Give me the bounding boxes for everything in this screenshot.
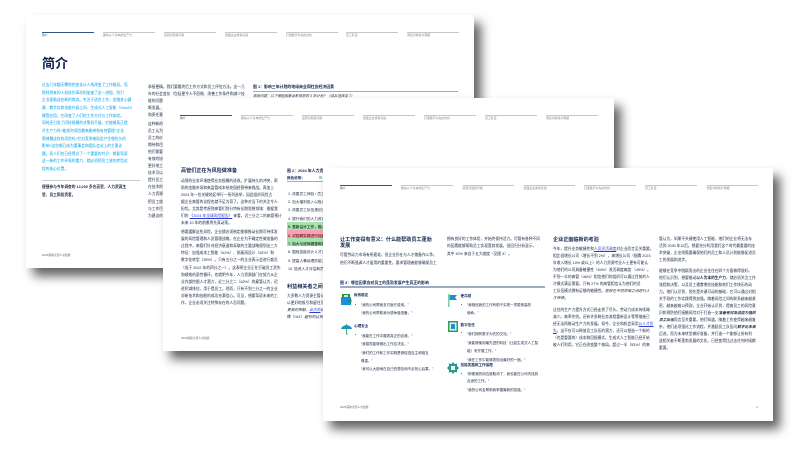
intro text in blue: 影响?这些都已成为董事会和团队会议上的主要议 [42,144,122,148]
quotes: 尊重。” [361,359,373,363]
navigation tabs: 员工队伍 [346,33,358,37]
navigation tabs: 调查对象和计算据 [546,116,569,120]
paragraph: column 4 top: 活到 2030 年以后。想要充分利用我们这个时代最重要的技 [659,244,755,248]
ranked items: 2. 加大福利投入以吸引和留 [288,200,333,204]
navigation tabs: 调查对象和计算据 [706,186,730,190]
column 2 text: 能的问题）增加了雇主和员工的期望。人才的能动变化在不 [148,98,245,102]
ranked items: 3. 改善员工队伍规划流程 [288,208,329,212]
navigation tabs [180,115,598,120]
figure 1 rule [253,91,458,92]
paragraph: column 3 top: 工队伍模式拥有足够的敏捷性。能够在不同领域之间进行人 [553,289,650,293]
paragraph: column 3 bottom: 先。这不仅可以释放员工队伍的潜力，还可以塑造一个新的 [553,329,650,333]
quotes: “我相信我的工作有助于实现一项更崇高的 [467,303,531,307]
bullets [461,304,462,305]
paragraph left: 尽管劳动力市场有所疲软，但企业仍在与人才储备作斗争。 [340,253,437,257]
ranked items: 9. 提高人事经理的能力 [288,259,325,263]
icon: chip [448,321,458,332]
intro text in blue: 需律最这样的风险吗?它对竞争格局会产生哪些久的 [42,137,126,141]
title: 简介 [42,56,68,71]
figure 3 rule [340,286,545,288]
panel: financial security [341,292,412,315]
navigation tabs: 运营创但和平衡 [462,186,483,190]
ranked items: 1. 改善员工体验 / 员工保留 [288,192,332,196]
intro text in blue: 康、数字化和技能升级之间，生成式人工智能（GenAI） [42,106,134,110]
navigation tabs: 简介 [42,33,48,37]
paragraph: column 3 bottom: 经无法再推动生产力的发展。如今，企业和机会采用以人才优 [553,322,653,326]
bullets [355,304,356,305]
column 2 second paragraph: 更好地工作的 [148,164,170,168]
icon: gear [447,362,459,374]
navigation tabs: 员工队伍 [485,116,497,120]
quotes: “我的公司会帮助我掌握最新的技能。” [467,388,525,392]
intro text in blue [42,82,134,171]
heading: 心理安全 [354,324,368,328]
paragraph: column 3 top [553,246,653,300]
quotes [467,332,538,362]
heading: meaningful work [340,236,432,249]
page 3: meaningful work [323,168,773,421]
navigation tabs: 打造数字为先的文化 [286,33,312,37]
column 2 second paragraph: 人力资源领导 [148,192,170,196]
ranked items: 8. 围绕技能设计人才流程 [288,250,329,254]
navigation tabs: 调查对象和计算据 [407,33,430,37]
bullets [461,372,462,374]
paragraph 2: 进积减排估，用于提员工。然而，只有不到三分之一的企业 [181,287,278,291]
navigation tabs [340,185,758,190]
paragraph 2: 业内部挖掘人才潜力，近三分之二（62%）的雇管认为，迟 [181,280,278,284]
paragraph: column 3 top: 为他们的公司具备敏捷性（54%）流活调度高度 （49%）。 [553,268,651,272]
quotes [361,302,412,315]
navigation tabs: 简介 [340,186,346,190]
column 2 second paragraph: 在技术的支持 [148,185,170,189]
heading: meaningful work: 让工作变得有意义：什么能帮助员工蓬勃 [340,236,432,242]
panel: psychological safety [341,324,434,371]
column 2 second paragraph: 为建议的企业 [148,214,170,218]
column 2 second paragraph: 他们需要更多 [148,150,170,154]
ranked items [288,192,333,271]
quotes: 合适的工作。” [467,379,489,383]
navigation tabs: 运营创但和平衡 [164,33,184,37]
paragraph: column 4 bottom: 员工队伍而言至关重要。他们知道，随着工作变得越来越复 [659,318,756,322]
icon: wallet [341,294,352,305]
panel: skills development and job security [447,362,538,392]
panel: sense of purpose [448,294,531,315]
heading: meaningful work: 发展 [340,243,350,249]
paragraph: column 4 bottom: 益相关者不断蓬勃发展的文化，已经变得比过去任何时候都 [659,339,756,343]
paragraph: column 4 bottom [659,268,756,350]
paragraph 2: 对新技术和技能的成功充满信心。可见，想要驾驭未来的工 [181,294,278,298]
column 2 text: 承接更精。我们要看终后工作方式和员工评估方法。这一几 [148,84,245,88]
ranked items: 7. 加大与进体健重和福利 [288,242,329,246]
footer: 2025麻球全部人才趋势 [340,405,369,409]
intro text in blue: 企业面临适应新的常态。专注于适合工作，金融身心健 [42,98,131,102]
heading: 财务稳定 [354,293,368,297]
paragraph: column 4 bottom: 迈进。而为未来转型做好准备，并打造一个能够让所有利 [659,332,752,336]
quotes: “我们的工作和工作实践是够促进自主和相互 [361,351,429,355]
paragraph: column 4 bottom: 关手段的工作实践得到加强。随着风险之间的联系越来越紧 [659,297,756,301]
paragraph: column 4 bottom: 杂，他们必须强化工作流程，并激励员工队伍向数字化未来 [659,325,756,329]
heading: 数字信任 [460,322,475,326]
page 2: executives preparing for risk [163,98,614,351]
column 2 second paragraph: 员工的价值与绩 [148,136,174,140]
navigation tabs: 员工队伍 [645,186,657,190]
column 2 text: 断发展。企业与员工的契约也在变化，那些考虑全员、成本 [148,106,245,110]
quotes: “我能够使用最先进的科技（比如生成式人工智 [467,341,538,345]
stakeholder text [287,293,330,319]
heading: 技能发展和工作保障 [460,362,493,366]
bold survey note: 管、员工和投资者。 [42,192,75,196]
ranked items: 6. 对招聘实践进行加强 [288,234,325,238]
footer: 2025麻球全部人才趋势 [181,336,210,340]
navigation tabs: 加强企业或者高绩 [524,186,547,190]
paragraph right: 拥有良好的工作体验，并始终保持活力。尽管有各种不同 [447,236,540,240]
quotes [467,372,538,392]
paragraph: column 4 top [659,236,756,262]
heading: 高管们正在为风险做准备 [181,168,237,174]
stakeholder text: 以更好地吸引和留住顶尖 [287,301,328,305]
column 2 second paragraph: 与工作目标 [148,207,167,211]
column 2 text: 和责任意识的公司更有机会。 [148,112,196,116]
paragraph 2: 想要缓解这些风险，企业就必须制定能够推动长期可持续发 [181,230,278,234]
figure 2 rule [287,181,497,182]
paragraph: column 3 top: 才模式满足需要。只有 27% 的高管相信认为他们的员 [553,282,641,286]
paragraph right: 的因素能够帮助员工实现蓬勃发展，但回归分析显示， [447,244,536,248]
ranked items: 4. 提升我们的人力资源能力 [288,217,333,221]
intro text in blue: 过去几年翻天覆地的变化从人地改变了工作格局。而 [42,83,128,87]
navigation tabs: 推动以人为本的生产力 [401,186,430,190]
quotes [467,302,531,315]
figure 1 title: 图 1：影响三年计划的地缘商业和社会经济因素 [253,84,334,89]
paragraph: column 4 bottom: 流程和决策，以及员工遇食哪些技能和他们工作快乐的动 [659,283,752,287]
paragraph 1: 担忧。尤其是考虑到高管们划分特有长期思想领域：根据我 [181,206,278,210]
highlight bands [287,222,327,230]
colour legend: 颜色说明： [287,176,305,180]
paragraph: column 3 top: 年收入增长 10% 或以上）的人力资源专业人士更有可能认 [553,261,648,265]
ranked items: 5. 重新设计工作，融入AI [288,225,329,229]
quotes: “我可以大胆地在自己的想法而不必担心后果。” [361,367,433,371]
navigation tabs: 推动以人为本的生产力 [241,116,270,120]
ranked list with highlights [287,192,333,271]
column 2 second paragraph: 员工认为，工作 [148,129,174,133]
stakeholder text: 傅（041）超有的比例认为 [287,315,330,319]
paragraph 1 [181,178,282,225]
paragraph 2: 过程中，高管们针对经济衰退和采取的主要战略规划出三大 [181,244,278,248]
paragraph: column 4 top: 管认为，如果不关键使用人工智能，他们的企业将无法存 [659,236,752,240]
intro text in blue: 升生产力吗?能如何风险最高能带和有何管理?企业 [42,129,124,133]
paragraph: column 3 bottom: 过往的生产力提升方式已经走到了尽头。劳动力成本持续绳 [553,308,650,312]
paragraph: column 4 bottom: 识和预防他们接触风险对于打造一支准备有对及适应力强的 [659,311,756,315]
column 2 second paragraph: 提升员工体验 [148,178,170,182]
paragraph 1: 动荡的业务环境使得业务规模的进改。扩展持久的冲突，帮 [181,178,278,182]
bullets [461,332,462,333]
icon: flag [448,294,457,307]
intro text in blue: 题。而人们也已经得出了一个重要的共识：想要驾驭 [42,152,128,156]
paragraph: column 4 bottom: 能够在竞争中脱颖而出的企业往往在四个方面做得很好。 [659,268,752,272]
stakeholder text: 大多数人力资源主管认为 [287,294,328,298]
intro text in blue: 同时还引发了同样规模的决策机不量。它能够真正提 [42,121,128,125]
paragraph 1: 未来 10 年的前景将先真动荡。 [181,220,232,224]
quotes: “我们拥有数字为先的文化。” [467,332,511,336]
paragraph 1: 2024 年一些关键地区举行一系列选举，因此组织风险占 [181,192,272,196]
navigation tabs: 打造数字为先的文化 [424,116,450,120]
paragraph 2 [181,229,281,305]
column 2 second paragraph: 这种新的现实正 [148,122,174,126]
paragraph: column 3 bottom: 减少。高率作别。还有许多跨业务流程重新设计等等措施已 [553,315,650,319]
paragraph 2: 展的风险管理和人员管理战略。在企业为不确定性做准备的 [181,237,278,241]
navigation tabs: 加强企业或者高绩 [363,116,386,120]
legend swatch [319,176,322,179]
paragraph 2: （低于 2022 年的四分之一）。这表明企业正在打破员工资失 [181,266,281,270]
column 2 text [148,84,245,117]
paragraph: column 3 bottom: （也是重要的）成本和回报模式。生成式人工智能已经开始 [553,336,650,340]
paragraph: column 4 top: 工的发展和进步。 [659,258,689,262]
bold survey note: 便捷参与今年调查的 12,200 多名高管、人力资源主 [42,184,126,188]
paragraph 2: 特征：加强成本工智能（41%）、质蔽再设计（43%）和 [181,251,274,255]
navigation tabs: 加强企业或者高绩 [225,33,248,37]
quotes: 使命。” [467,311,479,315]
paragraph: column 3 top: 不到一半的高管（46%）相信他们的组织可以通过目前的人 [553,275,650,279]
paragraph: column 3 top: 相比低增长公司（增长不到 2%），高增长公司（指腾 2023 [553,254,651,258]
paragraph: column 3 bottom [553,307,654,347]
panel: digital confidence [448,321,538,362]
quotes: “我的公司帮我支付医疗费用。” [361,303,409,307]
paragraph: column 4 bottom: 密，越来越难以预测，企业开始认识到，提高员工的风险意 [659,304,756,308]
paragraph left: 他们不断强调人才留用的重要性。要求管理者能够确保员工 [340,261,437,265]
paragraph 2: 和绩效的恶性循环。也就明今年，人力资源部门在努力从企 [181,273,278,277]
icon: umbrella [341,324,352,335]
quotes: “我的公司帮助我为退休做准备。” [361,311,412,315]
paragraph left [340,252,437,265]
paragraph 1: 助的金融市场和高监管成本给校园经营带来挑战。再加上 [181,186,274,190]
paragraph: column 4 bottom: 力。他们认识到，领先是关键可动的基础，它可以通过对相 [659,290,756,294]
paragraph: column 3 bottom: 被人们利用，它正在改变整个格局。超过一半（53%）的高 [553,343,650,347]
navigation tabs: 推动以人为本的生产力 [103,33,132,37]
page number: 4 [756,405,758,409]
footer: 2025麻球全部人才趋势 [42,253,71,257]
intro text in blue: 程的核心位置。 [42,167,68,171]
paragraph: column 3 top: 今年，提升业务敏捷性和人员灵活调度对企业而言至关重要。 [553,246,653,250]
paragraph: column 4 bottom: 重要。 [659,346,670,350]
page 1: introduction [26,15,474,268]
quotes: “我能在工作中展现真正的自我。” [361,334,412,338]
divider [42,179,140,182]
navigation tabs: 简介 [180,116,186,120]
paragraph right: 其中 42% 来自于五大维度（见图 3）。 [447,252,512,256]
figure 1 question: 高管问题：以下哪些因素会影响您的 3 年计划？（请从选择至 7） [253,94,354,98]
navigation tabs: 打造数字为先的文化 [584,186,610,190]
quotes: “我在工作中能够表现出最好的一面。” [467,358,525,362]
column 2 second paragraph: 技术可以帮 [148,171,167,175]
paragraph: column 4 bottom: 他们认识到，想要推动以人为本的生产力，就必须关注工作 [659,276,756,280]
quotes: 能）来开展工作。” [467,349,496,353]
paragraph 1: 据企业高管的议程也就不足为奇了。这种对当下的关注令人 [181,200,278,204]
bullets [355,334,356,335]
column 2 text: 年的社会变化（包括更令人不愿做、改善工作条件和减少技 [148,92,245,96]
heading: new challenges: 企业正面临新的考验 [553,236,599,242]
paragraph: column 3 top: 才转移。 [553,296,568,300]
figure 2 title: 图 2：2024 年人力资源的首要任务 [287,168,347,172]
paragraph right [447,236,540,256]
stakeholder heading: 利益相关者之间的差距 [287,284,338,290]
navigation tabs [42,32,459,37]
column 2 second paragraph: 期待和目标的 [148,143,170,147]
intro text in blue: 爆登应用，它改变了人们的工作方式与工作体验。 [42,114,124,118]
column 2 second paragraph: 把员工放在核 [148,200,170,204]
quotes: “即便我的岗位被取消了，我也能在公司内找到 [467,372,538,376]
paragraph 1: 们的 《2024 年全球风险报告》 来看，近三分之二的高管预计 [181,214,282,218]
ranked items: 10. 投资人才评估和员工 [288,267,327,271]
column 2 second paragraph [148,121,174,218]
bold survey note [42,184,126,197]
stakeholder text: 更高的贡献，此次的调查 [287,308,328,312]
quotes: “我感觉能够做出工作应决定。” [361,342,409,346]
intro text in blue: 那样到来的人机协作革命则加速了这一进程。则引 [42,91,124,95]
intro text in blue: 这一新的工作环境的重力，就必须把员工放在转型议 [42,159,128,163]
paragraph 2: 作，企业必须关注特殊存在的人员问题。 [181,301,248,305]
paragraph: column 4 top: 术突破，企业则需要确保他们的员工和人员计划能够促进员 [659,251,756,255]
column 2 second paragraph: 有效的协作能 [148,157,170,161]
navigation tabs: 运营创但和平衡 [302,116,322,120]
figure 3 title: 图 3：哪些因素会对员工的蓬勃发展产生真正的影响 [340,280,429,285]
heading: 使命感 [460,294,471,298]
paragraph 2: 数字化转型（39%）。只有五分之一的企业表示会进行裁员 [181,258,278,262]
quotes [361,334,434,371]
